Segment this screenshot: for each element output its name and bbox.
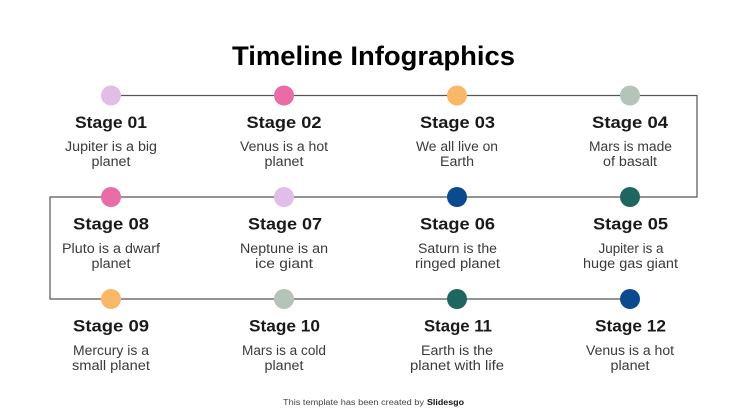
description 02 [240,139,328,169]
description 10: Mars is a cold [242,343,326,358]
description 12 [586,343,674,373]
description 06: ringed planet [415,256,500,271]
description 01 [65,139,157,169]
dot 06 [447,187,467,207]
stage 09 [72,289,150,373]
description 04: of basalt [603,154,657,169]
stage 12 [586,289,674,373]
heading 05: Stage 05 [593,214,668,234]
description 05: huge gas giant [583,256,678,271]
description 07: Neptune is an [240,241,328,256]
timeline connector line [50,96,697,299]
description 08: planet [92,256,131,271]
description 03: We all live on [416,139,498,154]
stage 05 [583,187,678,271]
dot 02 [274,86,294,106]
heading 07: Stage 07 [248,214,322,234]
heading 02: Stage 02 [246,113,322,132]
description 06 [415,241,500,271]
description 04: Mars is made [589,139,672,154]
description 08: Pluto is a dwarf [62,241,160,256]
stage 10 [242,289,326,373]
description 03: Earth [440,154,474,169]
description 05: Jupiter is a [598,241,664,256]
heading 06: Stage 06 [420,214,495,234]
heading 01: Stage 01 [75,113,147,132]
description 10: planet [264,358,304,373]
stage 01 [65,86,157,169]
description 04 [589,139,672,169]
stage 04 [589,86,672,169]
description 12: Venus is a hot [586,343,674,358]
description 07 [240,241,328,271]
heading 11: Stage 11 [424,316,492,336]
description 02: Venus is a hot [240,139,328,154]
stage 07 [240,187,328,271]
description 12: planet [610,358,650,373]
heading 08: Stage 08 [73,214,149,234]
stage 03 [416,86,498,169]
heading 09: Stage 09 [73,316,149,336]
dot 12 [620,289,640,309]
title: Timeline Infographics [232,41,515,71]
description 07: ice giant [255,256,313,271]
description 09: small planet [72,358,150,373]
stage 06 [415,187,500,271]
footer credit: Slidesgo [427,398,464,407]
dot 01 [101,86,121,106]
dot 04 [620,86,640,106]
heading 12: Stage 12 [595,316,666,336]
description 11 [410,343,504,373]
description 11: planet with life [410,358,504,373]
stage 08 [62,187,160,271]
stage 11 [410,289,504,373]
heading 03: Stage 03 [420,113,495,132]
dot 10 [274,289,294,309]
description 05 [583,241,678,271]
description 08 [62,241,160,271]
description 01: planet [92,154,131,169]
description 03 [416,139,498,169]
dot 11 [447,289,467,309]
description 09: Mercury is a [73,343,150,358]
heading 04: Stage 04 [592,113,669,132]
description 01: Jupiter is a big [65,139,157,154]
description 09 [72,343,150,373]
description 02: planet [264,154,304,169]
dot 03 [447,86,467,106]
description 06: Saturn is the [418,241,497,256]
footer credit: This template has been created by [283,398,424,407]
heading 10: Stage 10 [249,316,320,336]
dot 05 [620,187,640,207]
stage 02 [240,86,328,169]
footer credit [283,398,464,407]
dot 08 [101,187,121,207]
description 10 [242,343,326,373]
dot 09 [101,289,121,309]
dot 07 [274,187,294,207]
description 11: Earth is the [421,343,493,358]
